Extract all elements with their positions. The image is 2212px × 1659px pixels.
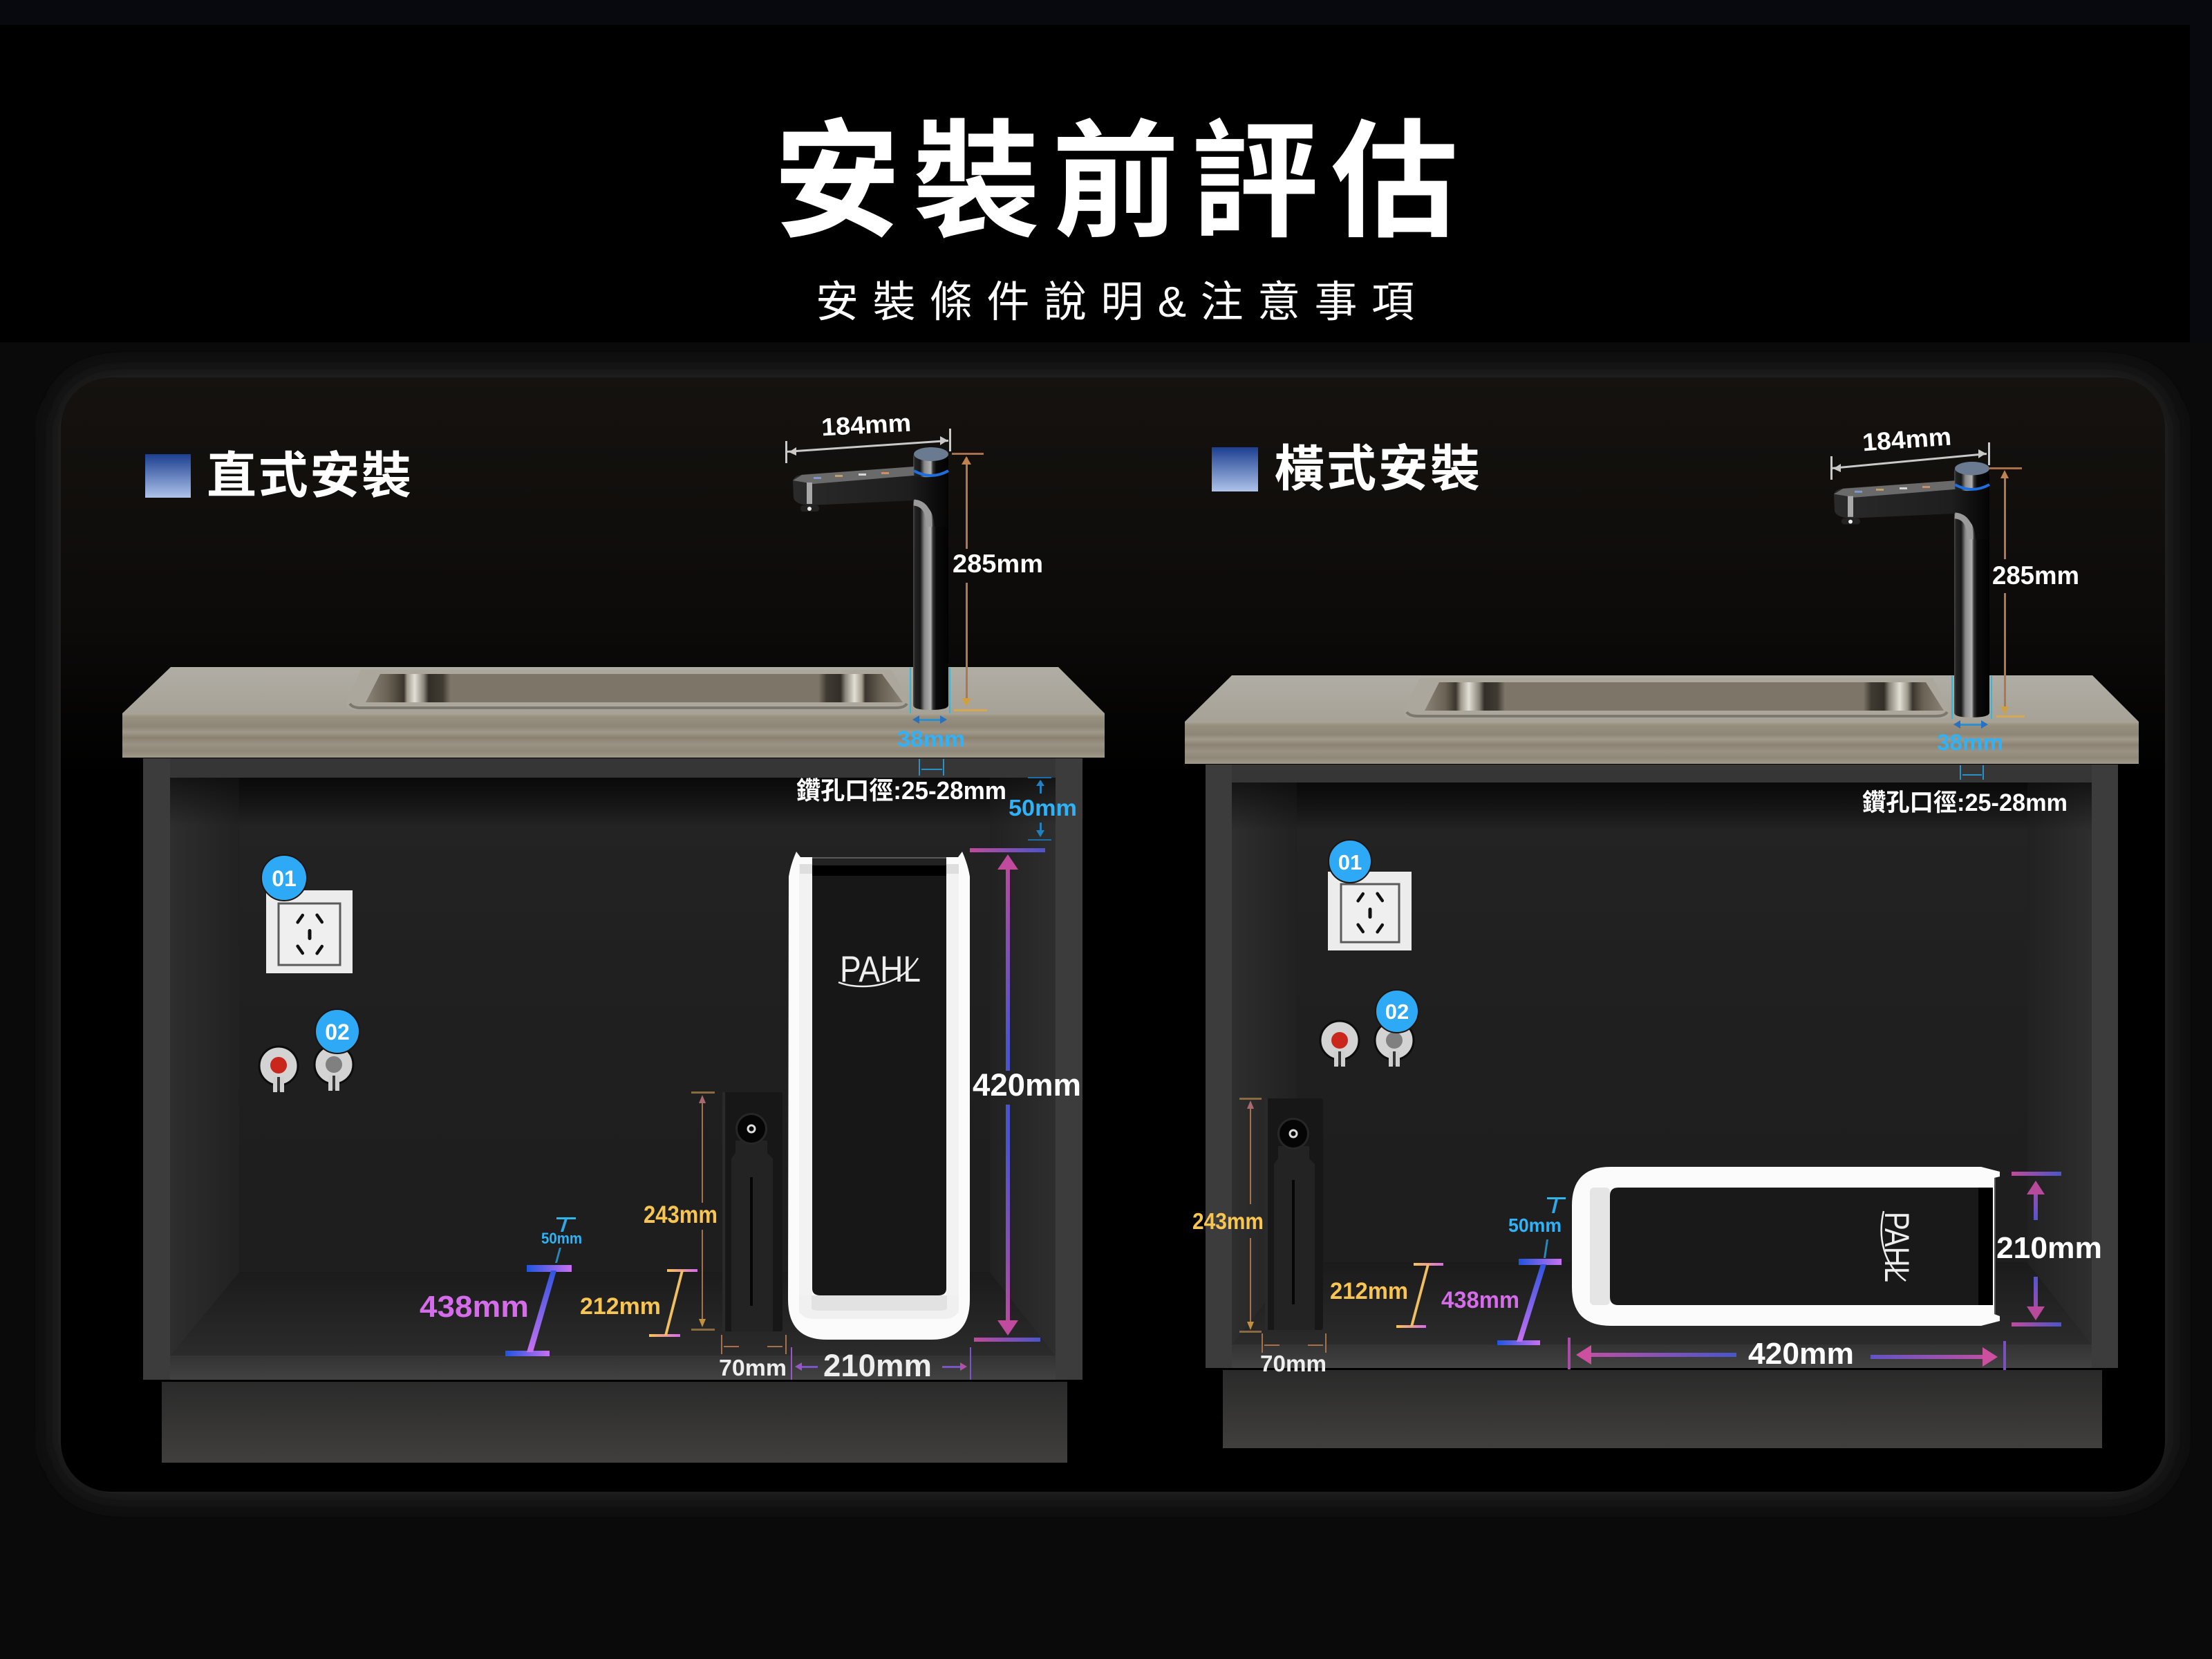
- dimension: small clearance 50mm: 50mm: [541, 1230, 582, 1247]
- dimension: unit height 420mm: [970, 848, 1081, 1342]
- dimension: faucet reach 184mm: [1830, 422, 1990, 480]
- dimension: drill hole bracket: [1960, 765, 1984, 780]
- dimension: faucet reach 184mm: 184mm: [821, 409, 912, 441]
- badge 02 and water valves: 02: [1385, 1000, 1409, 1024]
- dimension: faucet height 285mm: [1989, 467, 2079, 718]
- badge 01 and power socket: 01: [272, 866, 297, 891]
- panel glow: [61, 377, 2165, 1492]
- dimension: filter height 243mm: [1192, 1098, 1264, 1333]
- dimension: faucet base 38mm: [897, 668, 965, 751]
- dimension: filter width 70mm: 70mm: [719, 1355, 787, 1380]
- faucet: horizontal: [1834, 462, 1989, 718]
- countertop: vertical: [122, 667, 1105, 758]
- dimension: clearance depth 438mm: 438mm: [1441, 1287, 1519, 1313]
- dimension: small clearance 50mm: 50mm: [1508, 1215, 1562, 1236]
- dimension: filter depth 212mm: [580, 1269, 697, 1337]
- heading: vertical installation: 直式安裝: [207, 449, 411, 504]
- dimension: unit height 210mm: [1996, 1172, 2102, 1327]
- dimension: faucet reach 184mm: [785, 409, 951, 463]
- dimension: filter width 70mm: [719, 1335, 787, 1380]
- logo: PAHL vertical: PAHL: [840, 949, 921, 990]
- dimension: filter width 70mm: 70mm: [1260, 1351, 1327, 1376]
- label: drill hole diameter: 鑽孔口徑:25-28mm: [1862, 789, 2068, 816]
- dimension: filter height 243mm: 243mm: [644, 1201, 718, 1228]
- dimension: unit height 210mm: 210mm: [1996, 1231, 2102, 1265]
- badge 01 and power socket: 01: [1338, 850, 1362, 874]
- dimension: faucet reach 184mm: 184mm: [1862, 422, 1952, 456]
- dimension: faucet base 38mm: 38mm: [897, 727, 965, 751]
- dimension: faucet height 285mm: 285mm: [1992, 561, 2079, 590]
- countertop: horizontal: [1185, 675, 2139, 764]
- dimension: small clearance 50mm: [1508, 1197, 1566, 1258]
- cabinet: vertical: [143, 758, 1082, 1463]
- dimension: unit width 420mm: [1568, 1337, 2006, 1371]
- dimension: unit height 420mm: 420mm: [973, 1067, 1081, 1103]
- subtitle: 安裝條件說明&注意事項: [816, 279, 1414, 326]
- badge 01 and power socket: [261, 855, 353, 973]
- logo: PAHL horizontal: PAHL: [1877, 1212, 1916, 1282]
- badge 02 and water valves: [259, 1009, 359, 1092]
- dimension: filter depth 212mm: [1330, 1263, 1443, 1328]
- heading: horizontal installation: 橫式安裝: [1275, 442, 1480, 497]
- dimension: filter depth 212mm: 212mm: [1330, 1278, 1408, 1304]
- badge 02 and water valves: [1320, 990, 1418, 1067]
- main unit: vertical: [788, 852, 970, 1340]
- dimension: top clearance 50mm: [1009, 777, 1077, 841]
- dimension: clearance depth 438mm: 438mm: [420, 1290, 529, 1324]
- sink: vertical: [347, 670, 910, 710]
- badge 01 and power socket: [1328, 840, 1412, 950]
- dimension: faucet base 38mm: [1937, 676, 2003, 755]
- title: 安裝前評估: [774, 111, 1458, 253]
- main unit: horizontal: [1572, 1167, 2000, 1326]
- dimension: filter width 70mm: [1260, 1333, 1327, 1376]
- filter: horizontal: [1265, 1098, 1323, 1330]
- dimension: unit width 420mm: 420mm: [1748, 1337, 1854, 1371]
- heading marker: vertical: [145, 454, 191, 498]
- dimension: small clearance 50mm: [541, 1217, 582, 1263]
- dimension: unit width 210mm: [791, 1347, 971, 1383]
- panel: vertical installation: [122, 409, 1105, 1463]
- dimension: clearance depth 438mm: [1441, 1259, 1562, 1345]
- dimension: drill hole bracket: [919, 759, 944, 776]
- cabinet: horizontal: [1206, 765, 2118, 1448]
- faucet: vertical: [793, 447, 948, 710]
- badge 02 and water valves: 02: [325, 1020, 350, 1044]
- label: drill hole diameter: 鑽孔口徑:25-28mm: [796, 776, 1006, 805]
- dimension: filter height 243mm: 243mm: [1192, 1208, 1264, 1234]
- dimension: filter depth 212mm: 212mm: [580, 1293, 661, 1320]
- dimension: faucet base 38mm: 38mm: [1937, 730, 2003, 755]
- heading marker: horizontal: [1212, 447, 1258, 491]
- filter: vertical: [722, 1092, 782, 1331]
- dimension: top clearance 50mm: 50mm: [1009, 795, 1077, 821]
- dimension: clearance depth 438mm: [420, 1265, 572, 1356]
- dimension: faucet height 285mm: 285mm: [953, 550, 1043, 578]
- header band: [0, 0, 2212, 342]
- sink: horizontal: [1403, 678, 1950, 718]
- panel: horizontal installation: [1185, 422, 2139, 1448]
- panel: installation diagrams: [61, 377, 2165, 1492]
- dimension: filter height 243mm: [644, 1091, 718, 1331]
- dimension: faucet height 285mm: [952, 453, 1043, 711]
- dimension: unit width 210mm: 210mm: [823, 1348, 932, 1383]
